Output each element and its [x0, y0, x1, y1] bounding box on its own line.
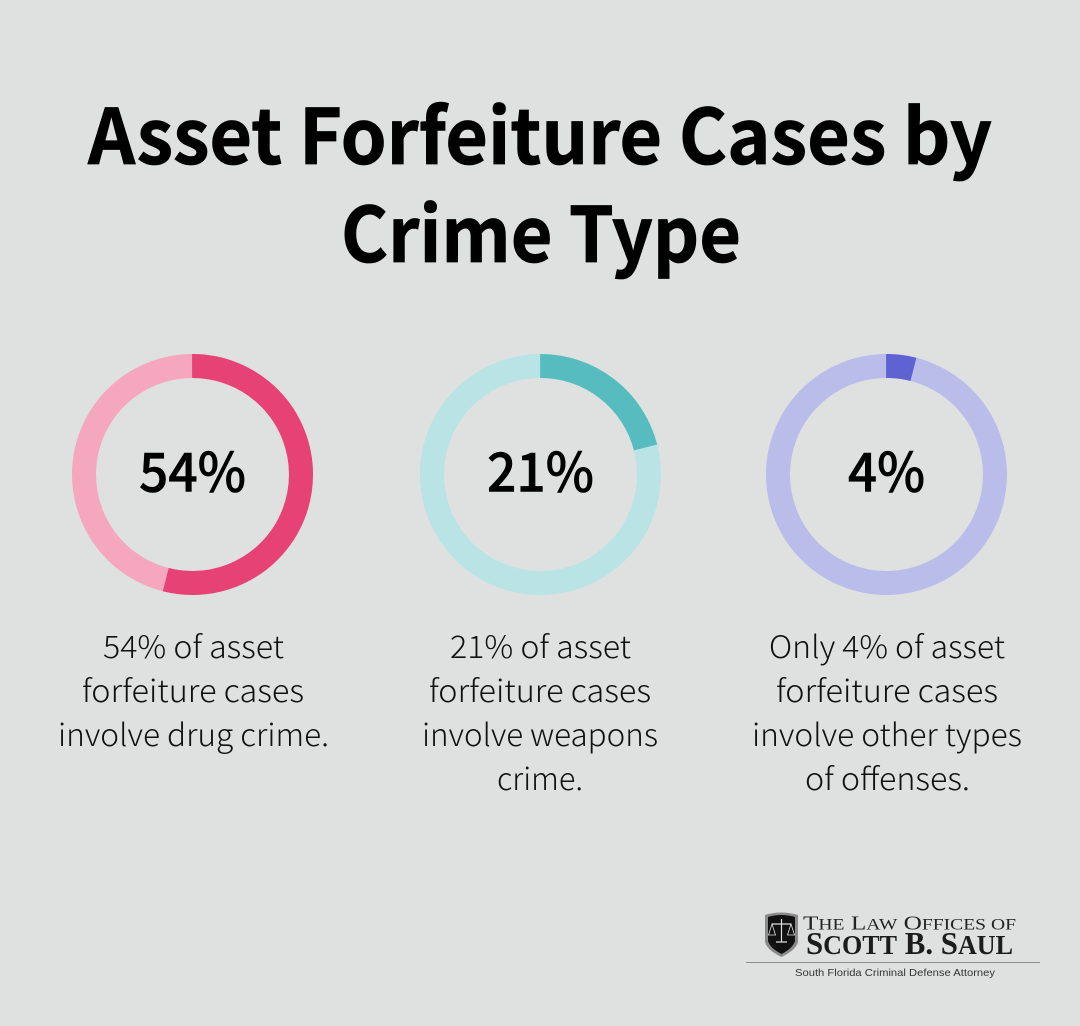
description: other offenses [752, 622, 1022, 799]
panel: drug crime [58, 366, 329, 755]
title [87, 76, 992, 284]
description: weapons crime: 21% of asset [450, 622, 631, 667]
description: drug crime: involve drug crime. [58, 710, 329, 755]
description: drug crime [58, 622, 329, 755]
description: drug crime: forfeiture cases [82, 666, 304, 711]
donut chart: 54% [84, 366, 301, 583]
donut chart: 21% [432, 366, 649, 583]
logo text: THE L AW O FFICES OF [803, 912, 1016, 934]
description: weapons crime: crime. [497, 754, 583, 799]
description: other offenses: Only 4% of asset [769, 622, 1005, 667]
donut chart: 4%: 4% [848, 428, 925, 508]
description: other offenses: forfeiture cases [776, 666, 998, 711]
title: Crime Type [341, 174, 741, 284]
logo: The Law Offices of Scott B. Saul [746, 912, 1040, 979]
description: other offenses: involve other types [752, 710, 1022, 755]
panel: other offenses [752, 366, 1022, 799]
description: weapons crime: involve weapons [422, 710, 658, 755]
icon: shield with scales [765, 912, 798, 957]
description: weapons crime [422, 622, 658, 799]
donut chart: 4% [778, 366, 995, 583]
logo name: SCOTT B. SAUL [806, 925, 1013, 961]
logo tagline: South Florida Criminal Defense Attorney [795, 967, 996, 979]
description: weapons crime: forfeiture cases [429, 666, 651, 711]
donut chart: 21%: 21% [487, 428, 594, 508]
description: other offenses: of offenses. [805, 754, 970, 799]
panel: weapons crime [422, 366, 658, 799]
title: Asset Forfeiture Cases by [87, 76, 992, 186]
donut chart: 54%: 54% [139, 428, 246, 508]
description: drug crime: 54% of asset [103, 622, 284, 667]
